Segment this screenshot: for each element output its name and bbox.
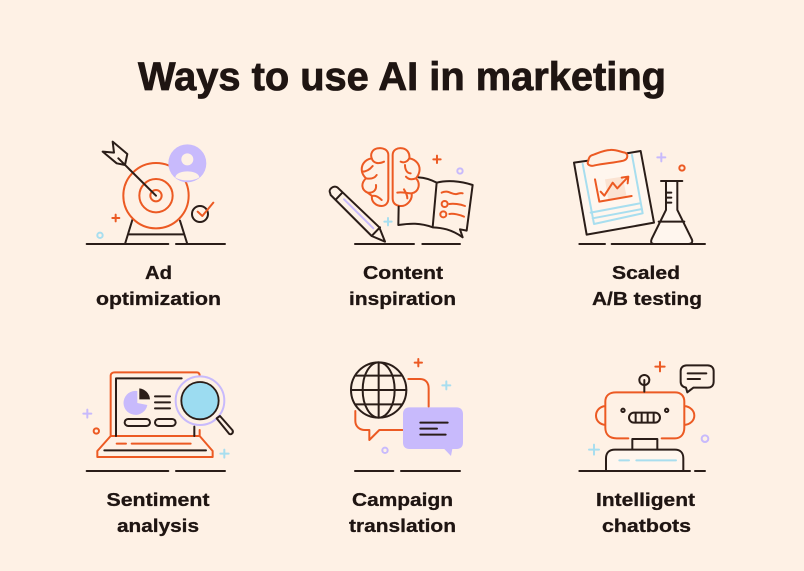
label: Ad optimization: Ad: [145, 262, 172, 283]
icon: brain, pencil and book: [330, 148, 473, 244]
label: Campaign translation: Campaign: [352, 489, 453, 510]
icon: target with arrow: [87, 142, 225, 244]
icon: globe and speech bubbles: [351, 359, 463, 471]
label: Sentiment analysis: [106, 489, 210, 536]
label: Content inspiration: inspiration: [349, 288, 456, 309]
label: Sentiment analysis: analysis: [117, 515, 199, 536]
label: Ad optimization: [96, 262, 221, 309]
label: Intelligent chatbots: [596, 489, 695, 536]
title: Ways to use AI in marketing: [138, 55, 666, 99]
label: Campaign translation: translation: [349, 515, 456, 536]
label: Scaled A/B testing: Scaled: [612, 262, 680, 283]
label: Intelligent chatbots: Intelligent: [596, 489, 695, 510]
label: Scaled A/B testing: A/B testing: [592, 288, 702, 309]
label: Content inspiration: [349, 262, 456, 309]
label: Scaled A/B testing: [592, 262, 702, 309]
label: Sentiment analysis: Sentiment: [106, 489, 210, 510]
label: Ad optimization: optimization: [96, 288, 221, 309]
label: Campaign translation: [349, 489, 456, 536]
label: Content inspiration: Content: [363, 262, 443, 283]
icon: clipboard and flask: [574, 150, 705, 244]
icon: laptop and magnifier: [83, 372, 233, 471]
icon: robot and chat bubble: [579, 362, 714, 471]
label: Intelligent chatbots: chatbots: [602, 515, 691, 536]
